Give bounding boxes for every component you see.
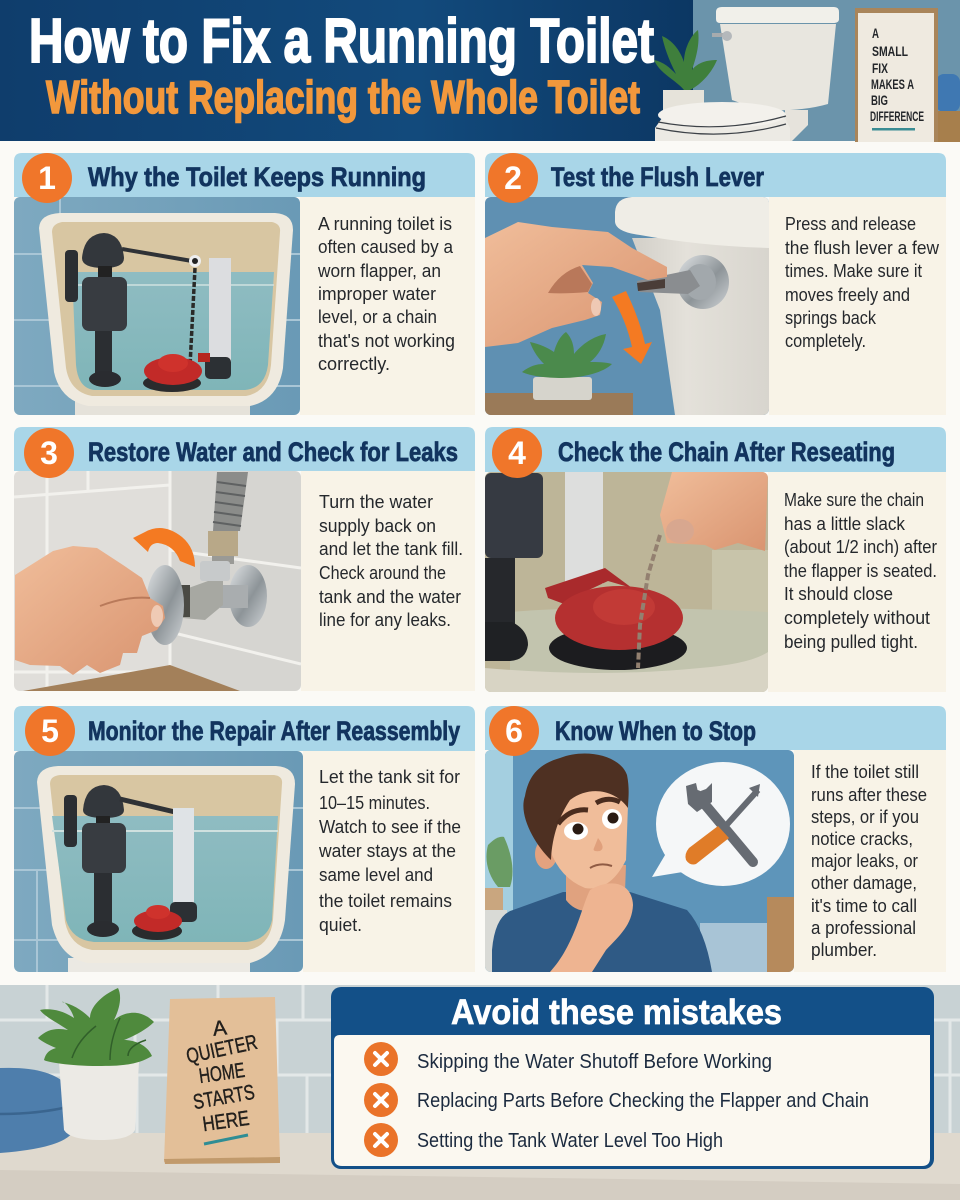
panel 4 text: has a little slack [784,514,906,534]
panel 6 text [811,762,927,960]
panel 6 text: runs after these [811,785,927,805]
panel 6 header [485,706,946,756]
framed poster [855,8,938,142]
panel 2 text: times. Make sure it [785,261,922,281]
panel 6 text: other damage, [811,873,917,893]
panel 5: monitor the repair after reassembly [14,706,475,972]
panel 5 header: 5 [41,713,59,749]
panel 6 text: If the toilet still [811,762,919,782]
panel 3 header: 3 [40,435,58,471]
mistake 3: Setting the Tank Water Level Too High [417,1130,723,1152]
counter [0,1133,960,1184]
panel 3 text: Turn the water [319,492,433,512]
panel 1 text: correctly. [318,354,390,374]
panel 3 text: and let the tank fill. [319,539,463,559]
panel 6 text: notice cracks, [811,829,913,849]
panel 5 illustration: reassembled tank [14,751,303,972]
panel 1 header: 1 [38,160,56,196]
panel 1 text: often caused by a [318,237,454,257]
mistakes box frame [331,987,934,1169]
panel 2 header: 2 [504,160,522,196]
panel 5 text: same level and [319,865,433,885]
panel 4 text: (about 1/2 inch) after [784,537,937,557]
wooden sign: A [212,1016,228,1041]
panel 5 text: Watch to see if the [319,817,461,837]
panel 4 text background [768,472,946,692]
panel: avoid these mistakes [331,987,934,1169]
panel 4 text: It should close [784,584,893,604]
header banner [0,0,960,142]
panel 5 text: quiet. [319,915,362,935]
panel 1: why the toilet keeps running [14,153,475,415]
panel 6 header: Know When to Stop [555,716,756,746]
panel 6 header: 6 [505,713,523,749]
panel 2 text: completely. [785,331,866,351]
panel 5 text: Let the tank sit for [319,767,460,787]
panel 1 header [14,153,475,203]
panel 1 illustration: open toilet tank [14,197,300,415]
panel 3 text background [301,471,475,691]
framed poster: SMALL [872,44,908,59]
panel 2 header: Test the Flush Lever [551,162,764,192]
framed poster: MAKES A [871,77,914,92]
mistake 1: Skipping the Water Shutoff Before Working [417,1051,772,1073]
panel 4 text: being pulled tight. [784,632,918,652]
panel 3 text: tank and the water [319,587,461,607]
panel 1 text: level, or a chain [318,307,437,327]
panel 4 header [485,427,946,478]
panel 2 header [485,153,946,203]
panel 6 text: plumber. [811,940,877,960]
mistake 1 [364,1042,772,1076]
mistakes title: Avoid these mistakes [451,993,782,1032]
panel 4 illustration: chain and flapper [485,472,768,692]
panel 2 text: moves freely and [785,285,910,305]
wooden sign: STARTS [191,1081,256,1114]
mistake 2 [364,1083,869,1117]
panel 4 header: 4 [508,435,526,471]
panel 4 text: the flapper is seated. [784,561,937,581]
panel 2 text: the flush lever a few [785,238,940,258]
framed poster: A [872,26,879,41]
wooden sign: QUIETER [184,1031,260,1068]
panel 5 text [318,767,461,935]
panel 6: know when to stop [485,706,946,972]
panel 1 text: A running toilet is [318,214,452,234]
panel 3 header: Restore Water and Check for Leaks [88,437,458,467]
panel 4 text: completely without [784,608,930,628]
panel 3: restore water and check for leaks [14,427,475,691]
panel 1 text: worn flapper, an [317,261,441,281]
towel [0,1068,76,1153]
panel 5 text: water stays at the [318,841,456,861]
panel 3 text [319,492,463,630]
wooden sign [164,997,280,1164]
wooden sign: HERE [201,1107,251,1136]
panel 1 text: improper water [318,284,436,304]
panel 2 text: springs back [785,308,877,328]
panel 2 illustration: hand on flush lever [485,197,769,415]
wooden sign: HOME [198,1059,246,1088]
potted plant [38,988,154,1140]
panel 6 text: a professional [811,918,916,938]
framed poster: BIG [871,93,888,108]
panel 3 header [14,427,475,478]
panel 1 text [317,214,455,374]
footer bathroom scene [0,985,960,1200]
panel 6 illustration: thinking man with tools [485,750,794,972]
panel 1 text: that's not working [318,331,455,351]
title: How to Fix a Running Toilet [29,7,654,76]
header bathroom scene [0,0,960,142]
panel 4 text [784,490,937,652]
panel 1 text background [300,197,475,415]
mistake 2: Replacing Parts Before Checking the Flapper and Chain [417,1090,869,1112]
panel 6 text: major leaks, or [811,851,918,871]
panel 2 text: Press and release [785,214,916,234]
panel 3 illustration: hand on shutoff valve [14,471,301,691]
panel 6 text: steps, or if you [811,807,919,827]
panel 4 text: Make sure the chain [784,490,924,510]
panel 5 text background [303,751,475,972]
panel 2: test the flush lever [485,153,946,415]
panel 5 header: Monitor the Repair After Reassembly [88,716,460,746]
panel 4: check the chain after reseating [485,427,946,692]
framed poster: FIX [872,61,888,76]
panel 2 text background [769,197,946,415]
panel 3 text: supply back on [319,516,436,536]
mistake 3 [364,1123,723,1157]
panel 6 text background [794,750,946,972]
panel 3 text: line for any leaks. [319,610,451,630]
subtitle: Without Replacing the Whole Toilet [46,71,640,123]
panel 2 text [785,214,940,351]
mistakes box body [334,1035,930,1166]
panel 5 text: 10–15 minutes. [319,793,430,813]
framed poster: DIFFERENCE [870,109,924,124]
panel 5 header [14,706,475,756]
panel 5 text: the toilet remains [319,891,452,911]
panel 1 header: Why the Toilet Keeps Running [88,162,426,192]
panel 3 text: Check around the [319,563,446,583]
panel 6 text: it's time to call [811,896,917,916]
